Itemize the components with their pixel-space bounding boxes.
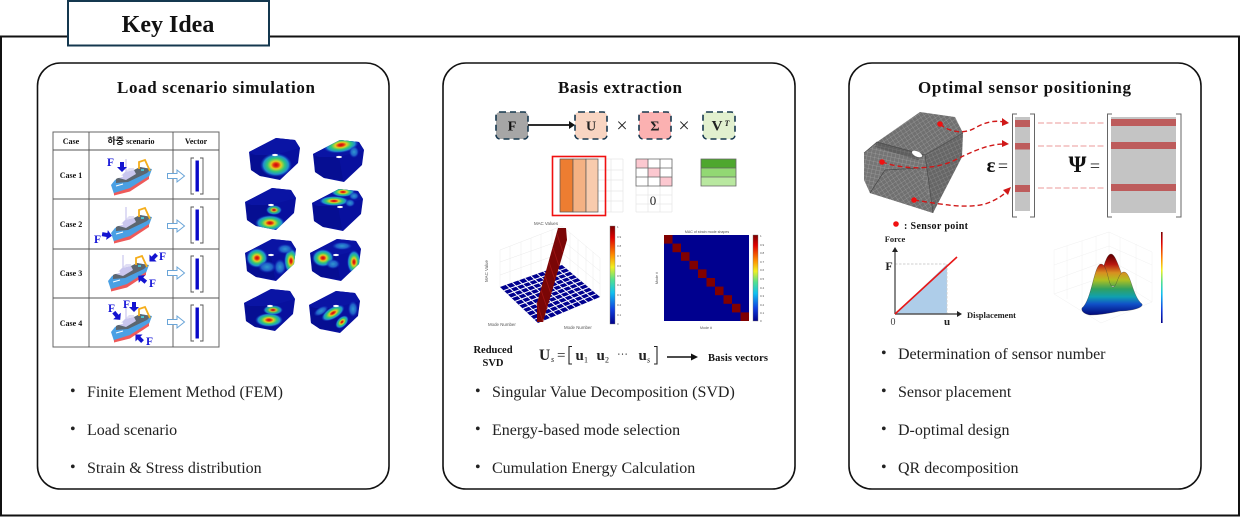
reduced SVD formula: 2 — [605, 356, 609, 364]
panel: basis extraction — [443, 63, 795, 489]
SVD equation: Σ — [650, 120, 660, 134]
icon: case 4 ship: F — [123, 299, 130, 311]
reduced SVD formula: u — [638, 348, 647, 364]
3D surface plot — [1054, 232, 1163, 323]
bullet list: • — [881, 345, 887, 362]
3D MAC chart: 0 — [617, 322, 619, 326]
icon: case 3 ship: F — [159, 251, 166, 263]
SVD equation: F — [508, 120, 516, 134]
3D MAC chart: MAC Value — [484, 260, 489, 282]
force displacement chart: Displacement — [967, 310, 1016, 320]
bullet list: • — [70, 383, 76, 400]
title tab: Key Idea: Key Idea — [122, 12, 214, 38]
matrix V transpose — [701, 159, 736, 186]
3D MAC chart: 0.9 — [617, 235, 622, 239]
3D MAC chart: 0.3 — [617, 293, 622, 297]
bullet list: Energy-based mode selection — [492, 422, 680, 439]
bullet list: • — [475, 459, 481, 476]
meshed structure — [864, 112, 963, 213]
3D MAC chart: 0.8 — [617, 244, 622, 248]
icon: case 3 ship: F — [149, 278, 156, 290]
matrix U — [552, 156, 623, 216]
icon: case 2 ship — [94, 207, 152, 246]
bullet list: • — [881, 459, 887, 476]
sensor points — [879, 121, 943, 203]
2D MAC chart: 0.2 — [760, 303, 765, 307]
reduced SVD formula: s — [551, 355, 554, 364]
epsilon equation — [987, 114, 1034, 217]
3D MAC chart: 1 — [617, 225, 619, 229]
sensor links — [882, 121, 1009, 206]
2D MAC chart: 0.4 — [760, 286, 765, 290]
dashed links — [1038, 123, 1105, 188]
bullet list: • — [881, 383, 887, 400]
case table: Case 1 — [60, 171, 82, 180]
SVD equation — [496, 112, 735, 139]
2D MAC chart: 0.3 — [760, 294, 765, 298]
2D MAC chart: 0 — [760, 319, 762, 323]
arrow to basis vectors — [667, 354, 698, 360]
FEM strain results — [244, 135, 364, 333]
3D MAC chart: 0.5 — [617, 274, 622, 278]
case table — [53, 132, 219, 348]
reduced SVD formula: u — [596, 348, 605, 364]
psi equation — [1069, 114, 1181, 217]
SVD equation: × — [678, 115, 690, 137]
sensor legend: : Sensor point — [904, 221, 969, 232]
force displacement chart: F — [885, 259, 893, 273]
reduced SVD formula: 1 — [584, 356, 588, 364]
3D MAC chart: MAC Values — [534, 221, 559, 226]
icon: case 3 ship — [108, 251, 166, 292]
bullet list: • — [881, 421, 887, 438]
panel: optimal sensor positioning — [849, 63, 1201, 489]
2D MAC chart: Mode # — [655, 272, 659, 284]
psi equation: Ψ — [1069, 152, 1087, 177]
arrows to vectors — [168, 170, 184, 328]
force displacement chart: u — [944, 316, 950, 328]
2D MAC chart: 1 — [760, 234, 762, 238]
bullet list: • — [70, 459, 76, 476]
case table: Case 4 — [60, 319, 82, 328]
icon: case 2 ship: F — [94, 234, 101, 246]
force displacement chart — [885, 234, 1016, 328]
SVD equation: × — [616, 115, 628, 137]
icon: case 1 ship — [107, 157, 152, 196]
bullet list — [475, 383, 735, 477]
force displacement chart: 0 — [890, 317, 896, 328]
2D MAC chart — [655, 230, 765, 330]
2D MAC chart: 0.5 — [760, 277, 765, 281]
icon: case 1 ship: F — [107, 157, 114, 169]
bullet list: Determination of sensor number — [898, 346, 1106, 363]
reduced SVD label: SVD — [482, 358, 504, 369]
reduced SVD formula — [539, 346, 657, 364]
bullet list: Sensor placement — [898, 384, 1012, 401]
3D MAC chart: Mode Number — [488, 322, 516, 327]
3D MAC chart: 0.2 — [617, 303, 622, 307]
2D MAC chart: 0.9 — [760, 243, 765, 247]
heading: Optimal sensor positioning — [918, 78, 1132, 97]
3D MAC chart: 0.1 — [617, 313, 622, 317]
reduced SVD formula: = — [557, 348, 565, 364]
bullet list: • — [475, 383, 481, 400]
icon: case 4 ship: F — [146, 336, 153, 348]
psi equation: = — [1090, 156, 1100, 176]
bullet list: Finite Element Method (FEM) — [87, 384, 283, 401]
reduced SVD label: Reduced — [473, 345, 513, 356]
3D MAC chart: 0.4 — [617, 283, 622, 287]
2D MAC chart: Mode # — [700, 326, 712, 330]
3D MAC chart: Mode Number — [564, 325, 592, 330]
matrix sigma — [636, 159, 672, 212]
matrix sigma: 0 — [650, 193, 656, 208]
case table: Case 3 — [60, 269, 82, 278]
icon: case 4 ship: F — [108, 303, 115, 315]
case table: Vector — [185, 137, 208, 146]
sensor arrowheads — [1002, 118, 1011, 195]
bullet list: Singular Value Decomposition (SVD) — [492, 384, 735, 401]
3D MAC chart: 0.7 — [617, 254, 622, 258]
force displacement chart: Force — [885, 234, 906, 244]
reduced SVD formula: u — [576, 348, 584, 364]
bullet list — [881, 345, 1106, 477]
reduced SVD formula: s — [647, 356, 650, 364]
3D MAC chart: 0.6 — [617, 264, 622, 268]
load vectors — [191, 158, 203, 341]
SVD equation: T — [725, 119, 731, 128]
case table: 하중 scenario — [108, 134, 154, 147]
heading: Basis extraction — [558, 78, 683, 97]
basis vectors label: Basis vectors — [708, 353, 768, 364]
epsilon equation: = — [998, 156, 1008, 176]
case table: Case 2 — [60, 220, 82, 229]
icon: case 4 ship — [108, 299, 153, 348]
2D MAC chart: 0.6 — [760, 268, 765, 272]
bullet list: • — [475, 421, 481, 438]
3D MAC chart — [484, 221, 622, 330]
case table: Case — [63, 137, 80, 146]
title tab: Key Idea — [68, 1, 269, 46]
reduced SVD formula: ⋯ — [617, 349, 628, 361]
reduced SVD label — [473, 345, 513, 369]
2D MAC chart: 0.7 — [760, 260, 765, 264]
bullet list: Strain & Stress distribution — [87, 460, 262, 477]
bullet list: D-optimal design — [898, 422, 1010, 439]
bullet list: Load scenario — [87, 422, 177, 439]
panel: load scenario simulation — [38, 63, 389, 489]
2D MAC chart: 0.8 — [760, 251, 765, 255]
bullet list: • — [70, 421, 76, 438]
2D MAC chart: 0.1 — [760, 311, 765, 315]
SVD equation: V — [712, 118, 723, 134]
SVD equation: U — [586, 120, 596, 134]
epsilon equation: ε — [987, 153, 996, 177]
bullet list — [70, 383, 283, 477]
2D MAC chart: MAC of strain mode shapes — [685, 230, 729, 234]
bullet list: Cumulation Energy Calculation — [492, 460, 695, 477]
bullet list: QR decomposition — [898, 460, 1018, 477]
reduced SVD formula: U — [539, 347, 550, 364]
heading: Load scenario simulation — [117, 78, 316, 97]
